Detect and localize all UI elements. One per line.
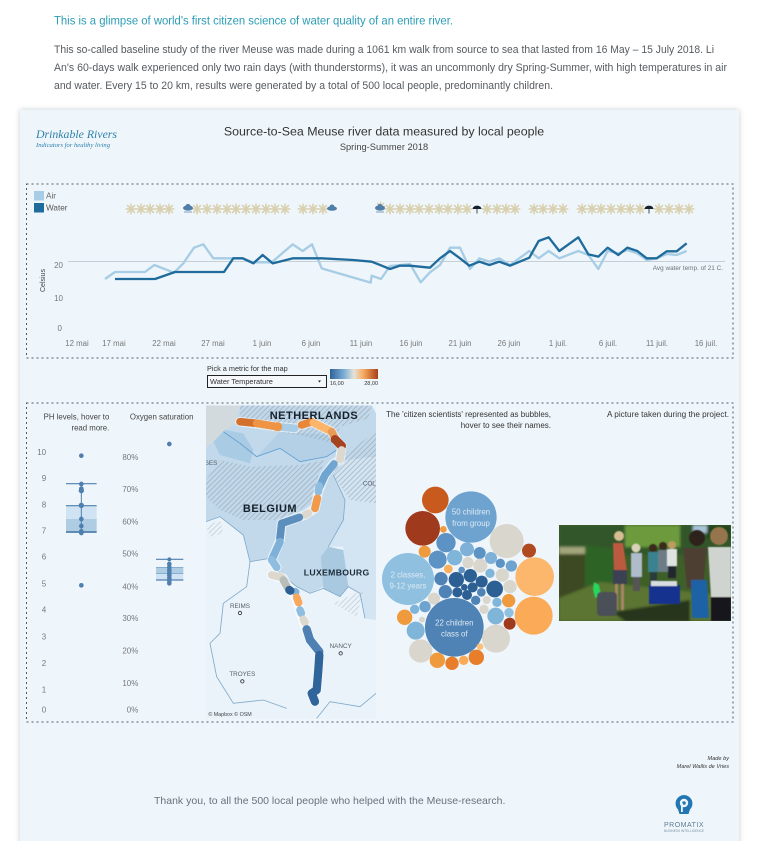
cool box lid bbox=[651, 581, 677, 586]
photo: children at the river bbox=[559, 525, 731, 621]
x axis dates: 21 juin bbox=[449, 339, 471, 348]
pH axis labels: 1 bbox=[42, 686, 47, 695]
logo: Drinkable Rivers bbox=[35, 127, 117, 149]
intro paragraph: This so-called baseline study of the river Meuse was made during a 1061 km walk from source to sea that lasted from 16 May – 15 July 2018. Li bbox=[54, 44, 714, 56]
y axis: 0 bbox=[58, 324, 63, 333]
pH axis labels: 10 bbox=[37, 448, 47, 457]
x axis dates: 27 mai bbox=[201, 339, 225, 348]
metric selector: Pick a metric for the map bbox=[207, 364, 288, 373]
thank you note: Thank you, to all the 500 local people who helped with the Meuse-research. bbox=[154, 795, 505, 807]
bubble labels: 2 classes, bbox=[391, 570, 425, 579]
colour legend bbox=[330, 369, 378, 387]
y axis: 20 bbox=[54, 261, 64, 270]
bubble labels bbox=[389, 508, 491, 639]
sea bbox=[206, 405, 240, 447]
heading: bubbles: The 'citizen scientists' represented as bubbles, bbox=[386, 410, 551, 419]
map: Meuse river bbox=[204, 405, 376, 719]
cool box bbox=[649, 585, 680, 604]
map place labels: REIMS bbox=[230, 603, 250, 610]
weather icons row bbox=[126, 202, 694, 214]
logo: Promatix: BUSINESS INTELLIGENCE bbox=[664, 829, 704, 833]
oxygen axis labels: 20% bbox=[122, 647, 138, 656]
bubble chart: citizen scientists bbox=[382, 487, 554, 670]
group of children bbox=[631, 541, 677, 591]
oxygen box bbox=[156, 442, 183, 586]
metric selector: Water Temperature bbox=[210, 377, 273, 386]
icon: umbrella bbox=[644, 206, 654, 214]
legend: air and water: Air bbox=[46, 192, 56, 200]
bubble labels: 22 children bbox=[435, 619, 473, 628]
pH axis labels: 3 bbox=[42, 632, 47, 641]
oxygen axis labels: 10% bbox=[122, 679, 138, 688]
people and gear bbox=[593, 527, 731, 621]
chart: oxygen saturation box plot bbox=[122, 413, 193, 715]
oxygen axis labels: 70% bbox=[122, 485, 138, 494]
intro paragraph: and water. Every 15 to 20 km, results were generated by a total of 500 local people, predominantly children. bbox=[54, 80, 553, 92]
dashboard title: Source-to-Sea Meuse river data measured by local people bbox=[224, 124, 544, 138]
map place labels: GES bbox=[204, 460, 217, 467]
intro paragraph: An's 60-days walk experienced only two rain days (with thunderstorms), it was an uncommonly dry Spring-Summer, with high temperatures in air bbox=[54, 62, 727, 74]
dashboard subtitle: Spring-Summer 2018 bbox=[340, 142, 428, 152]
pH axis labels bbox=[37, 448, 47, 715]
map place labels: © Mapbox © OSM bbox=[208, 711, 252, 718]
x axis dates: 17 mai bbox=[102, 339, 126, 348]
map place labels: LUXEMBOURG bbox=[304, 567, 370, 577]
adults on right bbox=[683, 527, 731, 621]
pH axis labels: 5 bbox=[42, 580, 47, 589]
bubble labels: 50 children bbox=[452, 508, 490, 517]
map place labels: TROYES bbox=[229, 671, 255, 678]
teacher bbox=[613, 531, 627, 610]
icon: umbrella bbox=[472, 206, 482, 214]
reference line label: Avg water temp. of 21 C. bbox=[653, 265, 723, 272]
intro paragraph bbox=[54, 44, 727, 92]
icon: cloud bbox=[327, 204, 337, 211]
heading: bubbles: hover to see their names. bbox=[461, 421, 551, 430]
x axis dates: 1 juil. bbox=[549, 339, 567, 348]
x axis dates: 22 mai bbox=[152, 339, 176, 348]
x axis dates: 16 juin bbox=[400, 339, 422, 348]
map place labels: NETHERLANDS bbox=[270, 410, 358, 422]
pH axis labels: 4 bbox=[42, 606, 47, 615]
oxygen axis labels: 50% bbox=[122, 550, 138, 559]
oxygen axis labels: 0% bbox=[127, 706, 138, 715]
x axis dates: 6 juil. bbox=[599, 339, 617, 348]
legend: air and water bbox=[34, 191, 68, 212]
air temperature line bbox=[105, 244, 687, 283]
icon: sun behind rain cloud bbox=[375, 202, 385, 213]
logo: Drinkable Rivers: Indicators for healthy living bbox=[35, 142, 111, 149]
x axis dates bbox=[65, 339, 717, 348]
legend: air and water: Water bbox=[46, 204, 68, 212]
heading: pH: read more. bbox=[71, 424, 109, 433]
heading: pH: PH levels, hover to bbox=[44, 413, 110, 422]
hatched regions bbox=[240, 405, 372, 443]
chart: pH box plot bbox=[37, 413, 110, 715]
average reference line bbox=[68, 260, 725, 262]
x axis dates: 12 mai bbox=[65, 339, 89, 348]
x axis dates: 16 juil. bbox=[695, 339, 717, 348]
Luxembourg bbox=[321, 547, 348, 597]
pH axis labels: 0 bbox=[42, 706, 47, 715]
heading: picture: A picture taken during the project. bbox=[607, 410, 729, 419]
map place labels: BELGIUM bbox=[243, 503, 297, 515]
dark Dutch west bbox=[213, 430, 253, 463]
oxygen axis labels: 30% bbox=[122, 614, 138, 623]
intro heading: This is a glimpse of world's first citizen science of water quality of an entire river. bbox=[54, 14, 453, 28]
green net bbox=[593, 582, 601, 598]
credit: made by: Marel Wallis de Vries bbox=[677, 764, 729, 770]
river segments bbox=[240, 422, 342, 702]
x axis dates: 6 juin bbox=[302, 339, 320, 348]
pH axis labels: 8 bbox=[42, 501, 47, 510]
heading: pH bbox=[44, 413, 110, 433]
bubble labels: 9-12 years bbox=[389, 581, 427, 590]
x axis dates: 11 juil. bbox=[646, 339, 668, 348]
Germany bbox=[328, 450, 376, 620]
colour legend: 16,00 bbox=[330, 381, 344, 387]
backpack bbox=[597, 592, 617, 616]
pH box bbox=[66, 453, 97, 588]
pH axis labels: 9 bbox=[42, 474, 47, 483]
oxygen axis labels: 80% bbox=[122, 453, 138, 462]
oxygen axis labels: 60% bbox=[122, 518, 138, 527]
icon: rain cloud bbox=[183, 204, 193, 213]
colour legend: 28,00 bbox=[364, 381, 378, 387]
map place labels: NANCY bbox=[330, 643, 353, 650]
credit: made by bbox=[677, 756, 730, 770]
bubble labels: class of bbox=[441, 630, 468, 639]
oxygen axis labels: 40% bbox=[122, 582, 138, 591]
bubble labels: from group bbox=[452, 519, 491, 528]
heading: oxygen: Oxygen saturation bbox=[130, 413, 193, 422]
credit: made by: Made by bbox=[708, 756, 730, 762]
map place labels bbox=[204, 410, 376, 718]
water temperature line bbox=[115, 237, 687, 279]
y axis: 10 bbox=[54, 294, 64, 303]
panel: lower section frame bbox=[26, 403, 733, 722]
x axis dates: 11 juin bbox=[350, 339, 372, 348]
x axis dates: 1 juin bbox=[253, 339, 271, 348]
borders bbox=[206, 432, 376, 718]
oxygen axis labels bbox=[122, 453, 138, 715]
metric selector bbox=[207, 364, 326, 388]
panel: temperature line chart bbox=[26, 184, 733, 358]
y axis bbox=[40, 261, 64, 333]
Netherlands and Belgium bbox=[206, 405, 376, 593]
logo: Promatix bbox=[664, 795, 704, 833]
map place labels: COL bbox=[363, 480, 376, 487]
x axis dates: 26 juin bbox=[498, 339, 520, 348]
pH axis labels: 6 bbox=[42, 552, 47, 561]
heading: bubbles bbox=[386, 410, 551, 430]
pH axis labels: 7 bbox=[42, 527, 47, 536]
pH axis labels: 2 bbox=[42, 659, 47, 668]
y axis: Celsius bbox=[40, 269, 47, 292]
logo: Promatix: PROMATIX bbox=[664, 822, 704, 829]
logo: Drinkable Rivers: Drinkable Rivers bbox=[35, 127, 117, 141]
